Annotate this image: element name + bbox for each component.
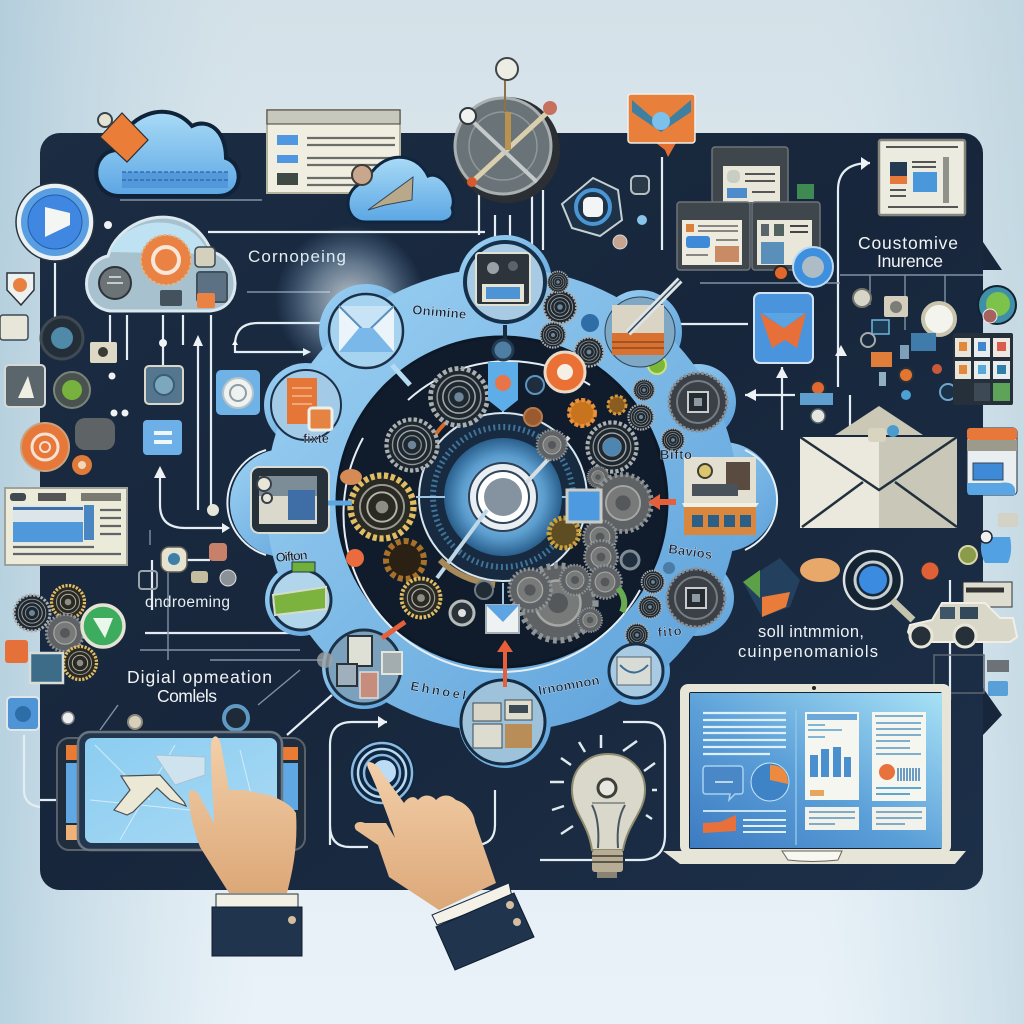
icon: crystal node (562, 176, 649, 249)
node: mail glow (329, 294, 403, 368)
glow behind mail (275, 225, 425, 375)
cloud: orange swirl (86, 217, 235, 311)
window: left document (5, 488, 127, 565)
ring labels: Oifton (275, 547, 308, 565)
label: Digital application controls: Comlels (157, 686, 217, 706)
dark main panel (40, 133, 1002, 890)
icon: large envelope (800, 406, 957, 528)
node: coin upper right (669, 373, 727, 431)
label: Digital application controls: Digial opmeation (127, 667, 272, 687)
icons: right cluster (745, 157, 1016, 423)
icon: light bulb (550, 735, 657, 878)
icons: search cluster and van (743, 513, 1018, 696)
inner dial (337, 337, 667, 672)
node: orange card (271, 370, 341, 440)
node: coin lower right (667, 569, 725, 627)
label: Customize insurance (858, 233, 958, 271)
label: Solution, implementation: soll intmmion, (758, 623, 864, 641)
icon column: left side (0, 221, 311, 533)
label: Digital application controls (127, 667, 272, 706)
ring labels: Bavios (668, 541, 713, 562)
node: green tag (271, 562, 331, 630)
window: top document (267, 110, 400, 193)
icon: blue play button (16, 183, 94, 261)
ring labels: Onimine (412, 302, 467, 322)
icon: mail pin top (628, 94, 695, 157)
ring nodes (251, 242, 759, 764)
laptop text panel (872, 712, 926, 830)
cloud: top left with orange tag (96, 112, 239, 196)
ring labels: Ehnoel (409, 678, 467, 703)
outer ring (230, 235, 777, 768)
laptop chart panel (805, 712, 859, 830)
node: shop (682, 457, 759, 535)
laptop left text (703, 713, 789, 833)
node: pen and document (605, 280, 680, 367)
ring labels: Irnomnon (537, 672, 601, 698)
icon: blue mail tile (754, 293, 813, 363)
thin dashed lines (100, 200, 983, 730)
white arcs around side nodes (227, 450, 777, 555)
label: Solution, implementation: cuinpenomaniols (738, 643, 878, 661)
node: top monitor (465, 242, 545, 322)
center small icons (340, 340, 676, 687)
label: Customize insurance: Coustomive (858, 233, 958, 253)
hand pointing (355, 762, 534, 970)
window: top right article (879, 140, 965, 215)
swirl tile (349, 716, 415, 806)
node: mail lower right (609, 644, 663, 698)
ring labels (275, 302, 713, 703)
label: onboarding: ondroeming (145, 594, 230, 611)
connectors to ring (328, 325, 505, 503)
cloud: paper plane (348, 157, 453, 222)
ring labels: fito (657, 623, 682, 640)
icon: right browser tile (967, 428, 1017, 495)
label: Solution, implementation (738, 623, 878, 661)
label: Composing: Cornopeing (248, 247, 346, 266)
icon: compass dial (454, 58, 560, 203)
ring labels: Bifto (660, 447, 692, 462)
node: bottom building (461, 680, 545, 764)
connector lines (24, 157, 950, 860)
gears cluster (350, 272, 684, 646)
ring labels: fixte (303, 431, 329, 446)
gears: lower left (5, 543, 248, 730)
node: photo stack (317, 630, 402, 704)
phone with plane (57, 732, 305, 850)
label: Customize insurance: Inurence (877, 251, 943, 271)
windows: top right (677, 147, 833, 287)
laptop (663, 684, 966, 864)
hand on phone (189, 736, 302, 956)
node: laptop left (251, 467, 329, 533)
